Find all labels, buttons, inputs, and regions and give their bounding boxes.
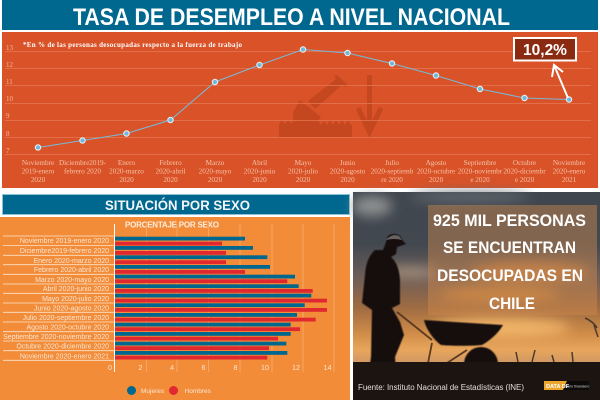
clouds [352, 192, 590, 338]
x axis labels: 2020-septiemb [371, 168, 414, 176]
row labels [3, 238, 109, 360]
x axis labels: 2020-octubre [417, 168, 455, 176]
overlay headline [433, 211, 586, 313]
x axis labels: 2020 [208, 176, 223, 184]
x axis values: 14 [324, 363, 332, 372]
x axis labels: Marzo [206, 159, 225, 167]
callout: 10,2%: 10,2% [523, 42, 567, 59]
x axis labels: Febrero [159, 159, 182, 167]
row labels: Mayo 2020-julio 2020 [42, 296, 109, 303]
x axis labels: 2020-diciembr [503, 168, 546, 176]
title banner: TASA DE DESEMPLEO A NIVEL NACIONAL [73, 4, 510, 31]
row labels: Noviembre 2020-enero 2021 [20, 354, 109, 360]
x axis labels: 2020-mayo [199, 168, 232, 176]
ground [353, 362, 600, 400]
panel: bar chart by sex [0, 217, 350, 400]
x axis values: 12 [292, 363, 300, 372]
note: *En % de las personas desocupadas respecto a la fuerza de trabajo [23, 41, 242, 49]
x axis values: 8 [234, 363, 238, 372]
chart title: PORCENTAJE POR SEXO [125, 220, 219, 230]
row labels: Septiembre 2020-noviembre 2020 [3, 334, 109, 341]
x axis values: 2 [138, 363, 142, 372]
row labels: Abril 2020-junio 2020 [43, 286, 109, 293]
arrow: to last point [552, 65, 568, 98]
y axis labels: 9 [6, 112, 10, 120]
x axis labels: 2020-enero [553, 168, 586, 176]
x axis labels: 2021 [562, 176, 577, 184]
row labels: Febrero 2020-abril 2020 [34, 267, 109, 274]
row separators [3, 236, 114, 360]
x axis labels: 2020 [429, 176, 444, 184]
x axis values [108, 363, 332, 372]
x axis labels: Octubre [513, 159, 536, 167]
x axis labels: Diciembre2019- [59, 159, 107, 167]
y axis labels: 12 [6, 61, 14, 69]
overlay headline: SE ENCUENTRAN [443, 238, 576, 257]
x axis labels: 2020-junio [244, 168, 276, 176]
row labels: Junio 2020-agosto 2020 [34, 306, 109, 312]
x axis labels: 2020-noviembr [458, 168, 503, 176]
grid lines [5, 52, 591, 154]
overlay headline: CHILE [489, 294, 535, 313]
panel: photo with silhouette [352, 192, 600, 400]
overlay headline: 925 MIL PERSONAS [433, 211, 586, 230]
x axis values: 10 [261, 363, 269, 372]
row labels: Noviembre 2019-enero 2020 [20, 238, 109, 245]
x axis labels [22, 159, 586, 184]
x axis labels: e 2020 [470, 176, 490, 184]
grass [516, 318, 598, 362]
x axis labels: 2020-abril [156, 168, 185, 176]
x axis labels: 2020 [31, 176, 46, 184]
vertical grid lines [146, 224, 334, 372]
row labels: Julio 2020-septiembre 2020 [23, 315, 109, 322]
row labels: Marzo 2020-mayo 2020 [35, 277, 109, 284]
hat highlight [386, 235, 402, 240]
legend: Hombres [184, 388, 212, 395]
row labels: Octubre 2020-diciembre 2020 [16, 344, 109, 350]
source: Fuente: Instituto Nacional de Estadísticas (INE) [358, 383, 524, 392]
row labels: Enero 2020-marzo 2020 [34, 258, 109, 265]
legend [127, 386, 212, 395]
line series [35, 47, 572, 150]
silhouette: worker with wheelbarrow [362, 234, 503, 381]
x axis labels: Abril [252, 159, 267, 167]
x axis labels: Noviembre [553, 159, 585, 167]
x axis labels: 2020 [163, 176, 178, 184]
y axis labels: 10 [6, 95, 14, 103]
x axis labels: 2020 [119, 176, 134, 184]
x axis labels: re 2020 [381, 176, 403, 184]
x axis labels: 2020-julio [288, 168, 318, 176]
y axis labels: 13 [6, 44, 14, 52]
logo: diario financiero [565, 384, 589, 388]
x axis labels: Noviembre [22, 159, 54, 167]
x axis labels: Enero [118, 159, 135, 167]
y axis labels: 8 [6, 130, 10, 138]
panel: line chart [2, 32, 598, 188]
x axis labels: febrero 2020 [64, 168, 101, 176]
y axis labels: 7 [6, 147, 10, 155]
x axis labels: 2020 [296, 176, 311, 184]
logo: DATA DF [546, 384, 570, 390]
x axis labels: Septiembre [464, 159, 496, 167]
x axis labels: 2019-enero [22, 168, 55, 176]
x axis labels: Agosto [426, 159, 447, 167]
x axis labels: Junio [340, 159, 356, 167]
x axis labels: 2020 [252, 176, 267, 184]
x axis values: 4 [170, 363, 174, 372]
y axis labels [6, 44, 14, 155]
row labels: Diciembre2019-febrero 2020 [20, 248, 109, 255]
overlay box [428, 205, 597, 315]
y axis labels: 11 [6, 78, 13, 86]
legend: Mujeres [141, 388, 165, 395]
axis line [114, 224, 116, 372]
logo [544, 381, 589, 390]
icon: shovel and down arrow watermark [279, 75, 381, 137]
x axis values: 6 [202, 363, 206, 372]
heading: situación por sexo: SITUACIÓN POR SEXO [105, 196, 250, 213]
callout: 10,2% [514, 38, 576, 60]
wheelbarrow frame [397, 312, 467, 363]
x axis labels: 2020-agosto [330, 168, 366, 176]
x axis values: 0 [108, 363, 112, 372]
bars: hombres [115, 242, 327, 360]
row labels: Agosto 2020-octubre 2020 [26, 324, 109, 332]
overlay headline: DESOCUPADAS EN [437, 266, 583, 285]
x axis labels: Julio [385, 159, 399, 167]
x axis labels: e 2020 [515, 176, 535, 184]
x axis labels: 2020 [340, 176, 355, 184]
x axis labels: 2020-marzo [109, 168, 144, 176]
heading: situación por sexo [2, 194, 350, 214]
x axis labels: Mayo [295, 159, 312, 167]
bars: mujeres [115, 237, 311, 355]
